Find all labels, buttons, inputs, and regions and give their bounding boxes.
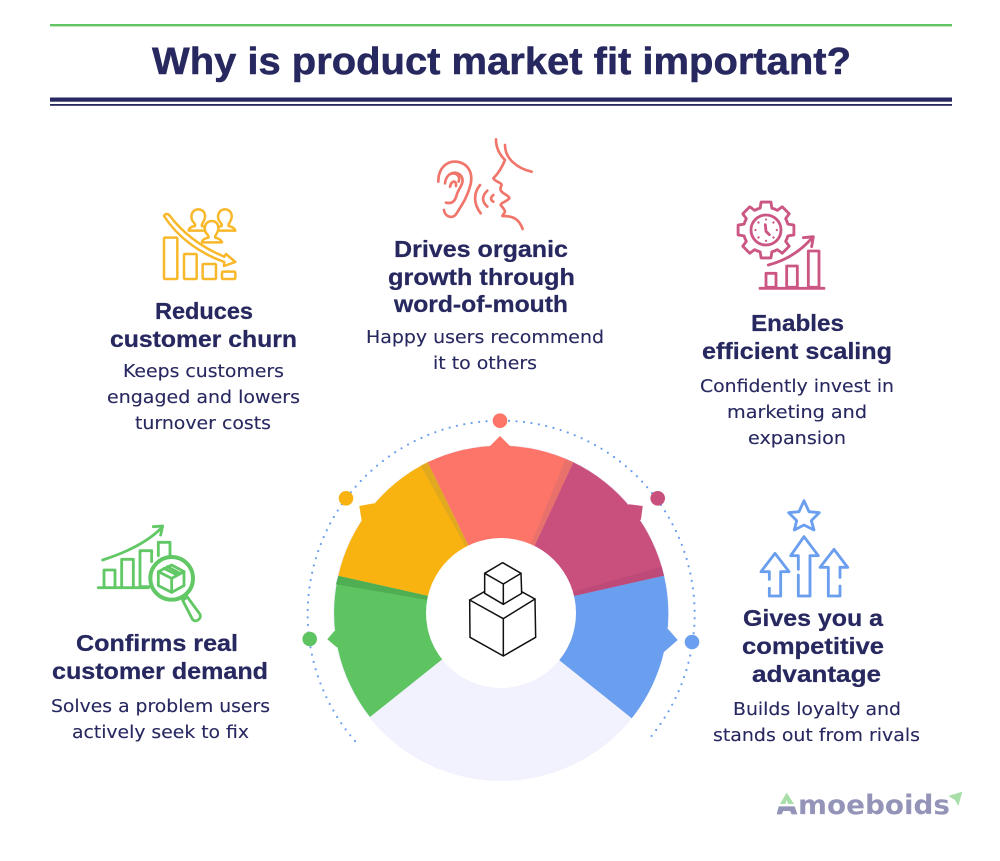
heading: competitive (742, 633, 884, 659)
heading (702, 310, 892, 364)
icon: gear clock and growth chart (738, 202, 824, 288)
heading (110, 298, 297, 352)
description (107, 362, 300, 434)
heading (742, 605, 884, 687)
description (51, 697, 270, 743)
icon: growth chart with magnifier on box (98, 526, 200, 621)
segment: yellow (338, 462, 501, 613)
heading: Confirms real (76, 630, 238, 656)
icon: ear and speaking face (438, 139, 532, 229)
heading (52, 630, 268, 684)
marker dots (302, 413, 699, 649)
panel: gives competitive advantage (713, 501, 920, 746)
heading: Reduces (155, 298, 253, 324)
chart: segmented wheel (302, 413, 699, 781)
description (700, 377, 894, 449)
heading: word-of-mouth (393, 291, 568, 317)
description: Happy users recommend (366, 328, 604, 348)
heading: Gives you a (743, 605, 883, 631)
description (366, 328, 604, 374)
segment: green (327, 576, 501, 717)
heading: customer demand (52, 658, 268, 684)
description: actively seek to fix (72, 723, 249, 743)
panel: drives organic growth (366, 139, 604, 374)
panel: confirms real customer demand (51, 526, 270, 743)
heading: customer churn (110, 326, 297, 352)
segment: blue (501, 576, 678, 718)
description: Builds loyalty and (733, 700, 901, 720)
description: it to others (433, 354, 537, 374)
segment: coral (428, 436, 573, 613)
description: Keeps customers (123, 362, 284, 382)
description: Solves a problem users (51, 697, 270, 717)
title: Why is product market fit important? (152, 41, 851, 83)
panel: enables efficient scaling (700, 202, 894, 449)
segment: magenta (501, 462, 664, 613)
heading (388, 236, 575, 317)
centre hub (426, 538, 576, 688)
heading: advantage (752, 661, 881, 687)
icon: falling bars with customers (164, 209, 235, 279)
heading: Drives organic (394, 236, 568, 262)
logo: moeboids (798, 790, 950, 821)
description: turnover costs (135, 414, 271, 434)
heading: Enables (751, 310, 844, 336)
description: marketing and (727, 403, 867, 423)
description: stands out from rivals (713, 726, 920, 746)
segment: lavender base (333, 445, 669, 781)
icon: stacked cubes (470, 563, 536, 656)
panel: reduces customer churn (107, 209, 300, 434)
heading: efficient scaling (702, 338, 892, 364)
description: Confidently invest in (700, 377, 894, 397)
dotted arc (308, 421, 695, 741)
description: expansion (748, 429, 846, 449)
description (713, 700, 920, 746)
icon: star above three up arrows (761, 501, 848, 596)
description: engaged and lowers (107, 388, 300, 408)
heading: growth through (388, 264, 575, 290)
